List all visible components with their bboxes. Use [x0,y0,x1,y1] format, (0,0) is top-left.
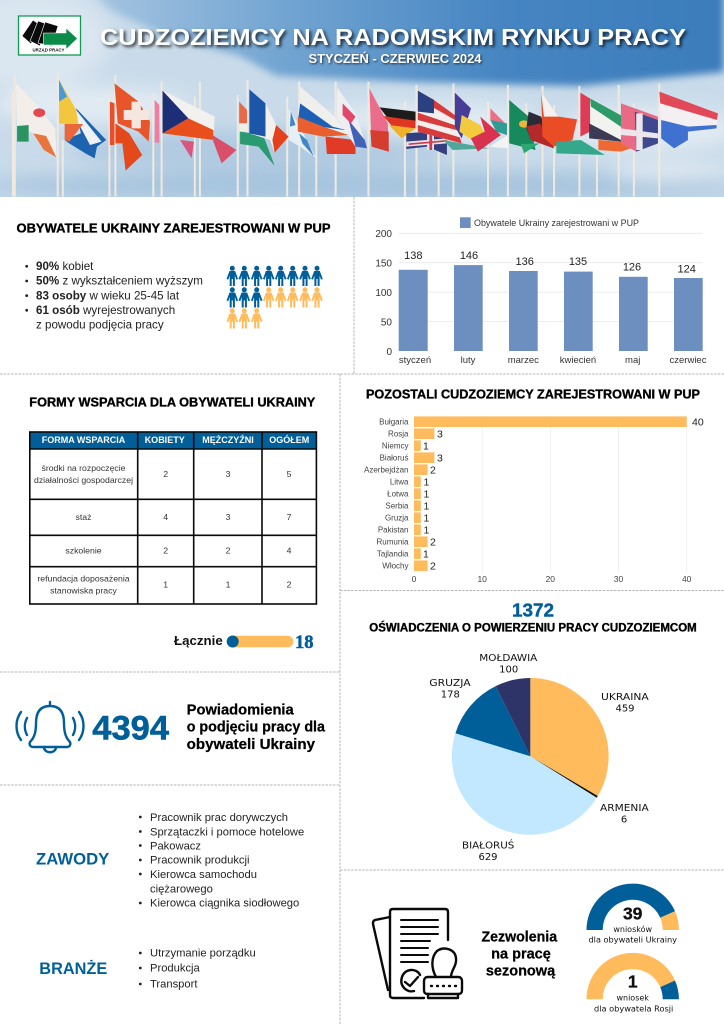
icon: document with stamp [373,909,462,998]
horizontal bar chart: 30 [614,574,623,584]
table: refundacja doposażenia [37,574,130,584]
occupations list: ciężarowego [150,883,213,895]
heading: FORMY WSPARCIA DLA OBYWATELI UKRAINY [29,395,316,410]
bar chart: Ukrainian citizens by month: marzec [508,355,539,366]
occupations list: Kierowca ciągnika siodłowego [150,897,299,909]
table: 3 [226,512,231,522]
heading: na pracę [491,946,551,962]
occupations list: Kierowca samochodu [150,869,257,881]
bar chart: Ukrainian citizens by month: luty [461,355,476,366]
gauge: Russia: 1 [628,971,638,991]
bullet list: 61 osób wyrejestrowanych [36,304,175,317]
bar chart: Ukrainian citizens by month: 200 [375,229,392,240]
table: 7 [287,512,292,522]
bullet list: z powodu podjęcia pracy [36,319,164,332]
industries list: Transport [150,978,198,990]
horizontal bar chart: 2 [430,464,436,476]
big number: 4394 [92,710,169,748]
pie labels: 178 [441,690,460,701]
bullet list [25,260,203,332]
horizontal bar chart: 1 [424,524,430,536]
pie labels: GRUZJA [429,678,471,689]
panel: industries [39,948,256,990]
occupations list: Pracownik produkcji [150,855,250,867]
horizontal bar chart: 20 [546,574,555,584]
header photo: sky with flags [0,0,724,202]
horizontal bar chart: Serbia [385,502,409,510]
table: staż [76,512,91,522]
pie labels: BIAŁORUŚ [462,838,514,851]
gauge: Ukraine: dla obywateli Ukrainy [588,936,677,945]
bar chart: Ukrainian citizens by month: 124 [678,263,696,275]
occupations list: Sprzątaczki i pomoce hotelowe [150,826,304,838]
bar chart: Ukrainian citizens by month: maj [625,355,640,366]
horizontal bar chart: 1 [423,548,429,560]
table: 4 [287,546,292,556]
horizontal bar chart: Niemcy [382,442,408,450]
horizontal bar chart: Bułgaria [379,418,409,426]
industries list: Produkcja [150,963,201,975]
panel: other foreigners registered [364,386,704,584]
horizontal bar chart: 1 [423,440,429,452]
horizontal bar chart: 40 [692,416,704,428]
table [29,432,317,604]
heading: POZOSTALI CUDZOZIEMCY ZAREJESTROWANI W PUP [366,386,700,402]
table: środki na rozpoczęcie [41,463,126,473]
horizontal bar chart: Białoruś [380,454,408,462]
table: 5 [287,469,292,479]
heading: BRANŻE [39,959,107,978]
total progress: Łącznie [174,633,223,648]
panel: occupations [36,812,304,909]
table: 2 [226,546,231,556]
bar chart: Ukrainian citizens by month: 0 [386,347,392,358]
panel: forms of support [29,395,317,653]
bar chart: Ukrainian citizens by month: 135 [569,256,587,268]
heading: OŚWIADCZENIA O POWIERZENIU PRACY CUDZOZIEMCOM [369,622,697,635]
horizontal bar chart: 1 [424,512,430,524]
bullet list: 83 osoby w wieku 25-45 lat [36,289,180,302]
total progress: 18 [295,632,314,653]
pie labels: MOŁDAWIA [479,653,537,664]
table: KOBIETY [145,435,185,445]
horizontal bar chart: Tajlandia [377,550,409,558]
subtitle: STYCZEŃ - CZERWIEC 2024 [308,51,482,66]
icon: bell [16,702,84,752]
pie labels: 459 [615,704,635,715]
horizontal bar chart: 0 [412,574,417,584]
table: szkolenie [65,546,102,556]
heading [481,930,558,980]
pie labels: 100 [499,665,518,676]
occupations list: Pracownik prac dorywczych [150,812,288,824]
gauge: Russia: wniosek [616,994,649,1003]
horizontal bar chart: 3 [437,428,443,440]
occupations list: Pakowacz [150,840,201,852]
panel: Ukrainian citizens registered [16,220,331,332]
pie labels: ARMENIA [600,803,649,814]
panel: notifications [16,702,326,753]
table: FORMA WSPARCIA [42,435,126,445]
horizontal bar chart: 1 [424,500,430,512]
heading: sezonową [486,964,556,980]
horizontal bar chart: 10 [477,574,487,584]
table: 2 [287,580,292,590]
title: CUDZOZIEMCY NA RADOMSKIM RYNKU PRACY [100,24,686,50]
description: o podjęciu pracy dla [187,720,326,736]
horizontal bar chart: Włochy [382,562,408,570]
table: 2 [163,546,168,556]
table: stanowiska pracy [50,586,117,596]
horizontal bar chart: Gruzja [385,514,409,522]
heading: OBYWATELE UKRAINY ZAREJESTROWANI W PUP [16,220,331,236]
horizontal bar chart: Pakistan [378,526,408,534]
pie labels: UKRAINA [601,692,649,703]
bar chart: Ukrainian citizens by month: 126 [623,262,641,274]
horizontal bar chart: 2 [430,560,436,572]
bullet list: 90% kobiet [36,260,94,273]
panel: work declarations [369,600,697,863]
icon: people pictogram [226,266,323,328]
table: MĘŻCZYŹNI [202,435,254,445]
bar chart: Ukrainian citizens by month: 150 [375,258,392,270]
pie labels: 6 [621,815,627,826]
description: Powiadomienia [187,702,295,718]
description: obywateli Ukrainy [187,737,315,753]
panel: seasonal work permits [373,884,679,1013]
bar chart: Ukrainian citizens by month [375,217,707,366]
horizontal bar chart: 1 [424,488,430,500]
horizontal bar chart: 40 [682,574,692,584]
table: 1 [226,580,231,590]
table: 4 [163,512,168,522]
industries list: Utrzymanie porządku [150,948,256,960]
flag poles [13,73,659,197]
bar chart: Ukrainian citizens by month: 138 [404,250,422,262]
bar chart: Ukrainian citizens by month: styczeń [399,355,431,366]
industries list [139,948,256,990]
bar chart: Ukrainian citizens by month: czerwiec [670,355,707,366]
horizontal bar chart: 1 [424,476,430,488]
heading: ZAWODY [36,850,110,868]
occupations list [139,812,304,909]
gauge: Russia [586,953,679,1013]
bar chart: Ukrainian citizens by month: 146 [460,250,478,262]
total progress [174,632,314,653]
bar chart: Ukrainian citizens by month: 50 [381,318,392,328]
table: działalności gospodarczej [34,475,133,485]
bar chart: Ukrainian citizens by month: kwiecień [560,355,596,366]
horizontal bar chart: Litwa [390,478,409,486]
gauge: Russia: dla obywatela Rosji [594,1004,673,1013]
bar chart: Ukrainian citizens by month: 136 [516,256,534,268]
horizontal bar chart: 2 [430,536,436,548]
horizontal bar chart: Azerbejdżan [364,466,408,474]
bar chart: Ukrainian citizens by month: 100 [375,288,392,299]
gauge: Ukraine [586,884,679,945]
horizontal bar chart [364,416,704,584]
horizontal bar chart: Rosja [388,430,409,438]
pie labels [429,653,649,863]
chart legend: Obywatele Ukrainy zarejestrowani w PUP [474,218,639,229]
logo: Urząd Pracy: URZĄD PRACY [32,48,65,52]
pie chart [452,678,609,835]
table: 3 [226,469,231,479]
table: 1 [163,580,168,590]
flags row [13,73,718,197]
heading: Zezwolenia [481,930,558,946]
table: OGÓŁEM [269,434,309,445]
gauge: Ukraine: wniosków [613,924,652,934]
logo: Urząd Pracy [18,16,80,55]
gauge: Ukraine: 39 [623,903,643,923]
horizontal bar chart: Rumunia [376,538,409,546]
table: 2 [163,469,168,479]
horizontal bar chart: 3 [437,452,443,464]
description [187,702,326,753]
total number: 1372 [512,600,554,621]
bullet list: 50% z wykształceniem wyższym [36,275,203,288]
horizontal bar chart: Łotwa [387,490,409,498]
pie labels: 629 [478,852,498,863]
